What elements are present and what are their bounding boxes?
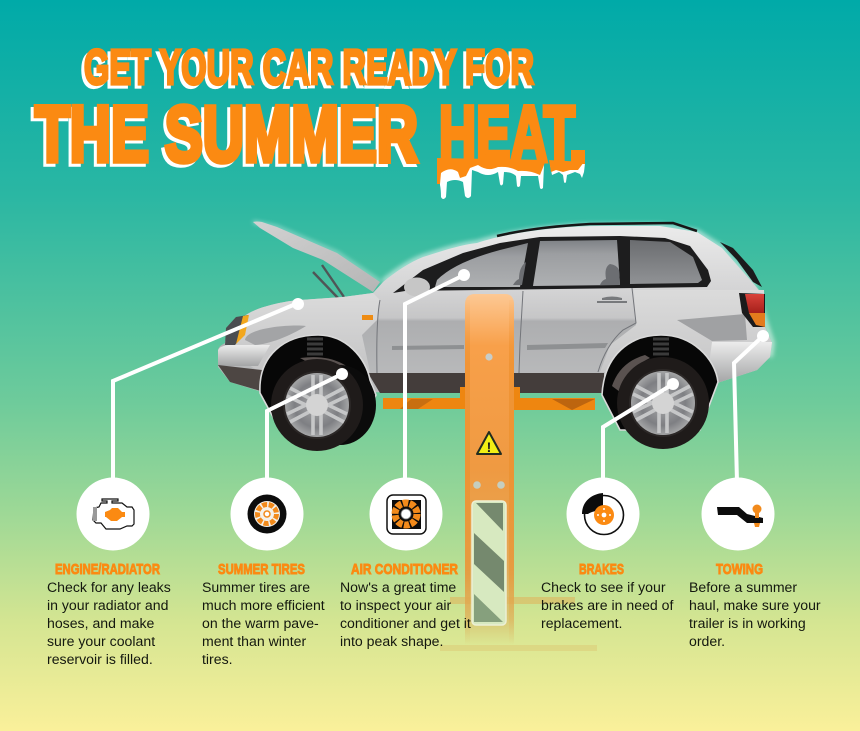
door handle	[597, 296, 627, 303]
car body	[218, 226, 772, 393]
door lines	[377, 288, 636, 373]
passenger silhouettes	[513, 262, 620, 285]
right arm shadow	[552, 399, 595, 410]
title	[32, 41, 585, 199]
title line one: GET YOUR CAR READY FOR	[81, 44, 531, 98]
roof rack	[497, 223, 697, 236]
heading: BRAKES	[579, 561, 624, 578]
description: brakes are in need of	[541, 597, 673, 613]
front wheel	[271, 359, 363, 451]
rear bumper	[708, 342, 772, 383]
front inner fender	[300, 357, 364, 400]
title line one	[81, 41, 534, 98]
rear wheel arch	[602, 335, 718, 430]
lower sill	[368, 373, 604, 393]
description: conditioner and get it	[340, 615, 471, 631]
icon: brake disc	[566, 478, 640, 550]
towing callout line	[734, 330, 769, 482]
front spring	[307, 339, 323, 354]
description: trailer is in working	[689, 615, 806, 631]
headlight	[225, 315, 248, 345]
rear glass strip	[720, 242, 762, 287]
brakes callout line	[603, 378, 679, 482]
rear window	[630, 240, 702, 284]
description: Summer tires are	[202, 579, 310, 595]
warning triangle	[477, 432, 501, 455]
description: order.	[689, 633, 725, 649]
item: towing	[689, 478, 821, 649]
front bumper lower	[218, 365, 264, 392]
side shading	[245, 326, 306, 345]
left arm shadow	[400, 399, 433, 409]
description: haul, make sure your	[689, 597, 821, 613]
bolts	[473, 481, 505, 489]
description: ment than winter	[202, 633, 306, 649]
melting word heat	[437, 89, 585, 199]
column edge shading	[465, 300, 514, 645]
lower cross bar	[450, 597, 575, 604]
heading: ENGINE/RADIATOR	[55, 561, 160, 578]
icon: engine	[76, 478, 150, 550]
item: engine/radiator	[47, 478, 171, 667]
turn signal	[362, 315, 373, 320]
description: Check to see if your	[541, 579, 666, 595]
description: Before a summer	[689, 579, 797, 595]
window frame	[393, 236, 711, 293]
description: hoses, and make	[47, 615, 154, 631]
front inner tyre	[304, 365, 376, 445]
air conditioner callout line	[405, 269, 470, 482]
tail light	[739, 293, 765, 327]
description: replacement.	[541, 615, 622, 631]
item: summer tires	[202, 478, 325, 667]
heading: SUMMER TIRES	[218, 561, 305, 578]
description: much more efficient	[202, 597, 325, 613]
right lift arm	[513, 387, 595, 410]
front wheel arch	[260, 335, 376, 430]
middle window	[533, 240, 620, 286]
mirror	[404, 278, 430, 296]
lift column	[465, 294, 514, 645]
item: brakes	[541, 478, 673, 631]
description: to inspect your air	[340, 597, 452, 613]
description: tires.	[202, 651, 233, 667]
description: on the warm pave-	[202, 615, 319, 631]
heading: AIR CONDITIONER	[351, 561, 458, 578]
rear fender	[600, 290, 772, 383]
icon: tire	[230, 478, 304, 550]
icon: trailer hitch	[702, 478, 774, 550]
description: Now's a great time	[340, 579, 456, 595]
front bumper	[218, 345, 270, 366]
left lift arm	[383, 387, 466, 409]
car	[218, 222, 772, 451]
title line one: GET YOUR CAR READY FOR	[84, 41, 534, 95]
engine callout line	[113, 298, 304, 482]
base plate	[440, 645, 597, 651]
description: sure your coolant	[47, 633, 155, 649]
car lift	[383, 294, 597, 651]
hood glow	[253, 222, 380, 282]
rear spring	[653, 339, 669, 354]
open hood	[253, 222, 380, 292]
item: air conditioner	[340, 478, 471, 649]
icon: fan	[370, 478, 442, 550]
melting word heat: HEAT	[439, 89, 575, 178]
description: reservoir is filled.	[47, 651, 153, 667]
callout lines	[113, 269, 769, 482]
description: into peak shape.	[340, 633, 443, 649]
heading: TOWING	[716, 561, 763, 578]
column top rivet	[485, 353, 493, 361]
front window	[435, 243, 528, 287]
description: Check for any leaks	[47, 579, 171, 595]
description: in your radiator and	[47, 597, 168, 613]
title line two: THE SUMMER	[32, 92, 415, 181]
rear wheel	[617, 357, 709, 449]
car glow	[383, 226, 772, 357]
tires callout line	[267, 368, 348, 482]
striped safety panel	[472, 501, 506, 625]
rear inner fender	[612, 355, 650, 392]
front fender	[225, 293, 380, 372]
hood struts	[313, 265, 344, 298]
warning triangle: !	[487, 439, 491, 455]
title line two: THE SUMMER	[35, 89, 418, 178]
mouldings	[392, 343, 608, 350]
